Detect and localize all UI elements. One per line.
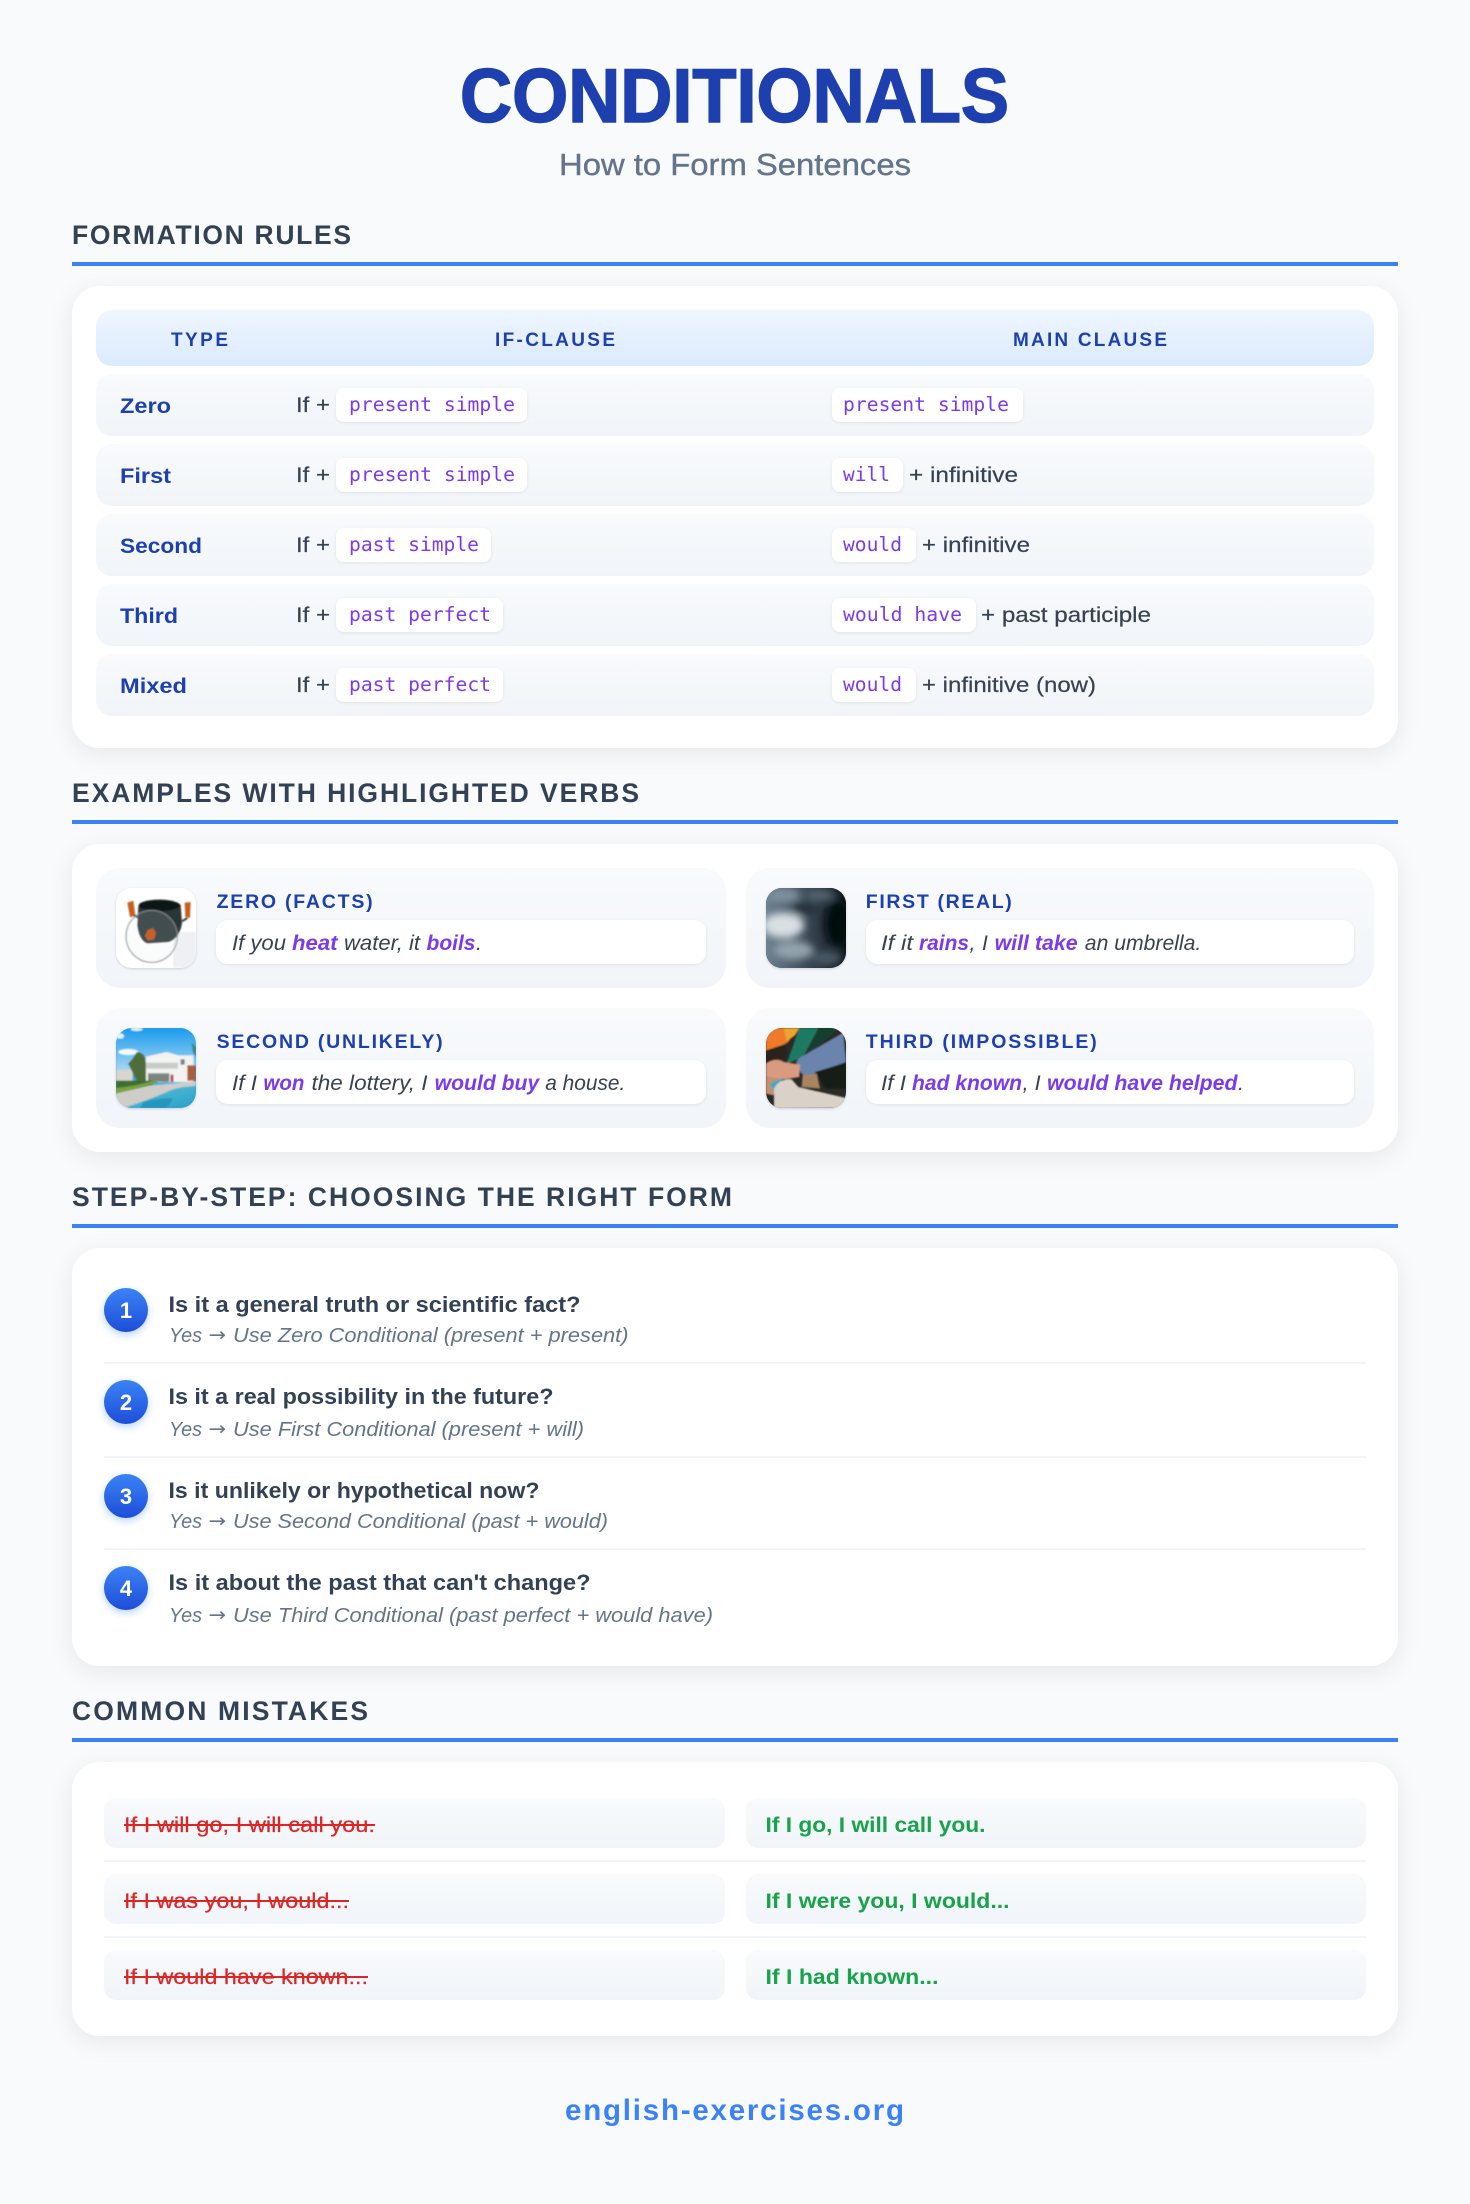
sentence: .	[476, 932, 482, 955]
row: mixed: + infinitive (now)	[922, 674, 1096, 697]
row: zero: present simple	[349, 393, 515, 416]
subtitle: How to Form Sentences	[559, 147, 911, 182]
row: mixed: would	[843, 673, 902, 696]
sentence: boils	[426, 932, 476, 955]
row: first: will	[843, 463, 890, 486]
sentence: If I	[881, 1072, 906, 1095]
mistake 2 correct	[746, 1874, 1366, 1924]
step 4: Yes	[169, 1605, 202, 1627]
sentence: water, it	[344, 932, 421, 955]
row: mixed: Mixed	[120, 675, 187, 698]
example: second	[96, 1026, 726, 1128]
panel: common mistakes	[72, 1762, 1398, 2036]
sentence: If I	[232, 1072, 257, 1095]
mistake 2 wrong: If I was you, I would...	[124, 1890, 349, 1913]
icon: stacked hands	[766, 1028, 846, 1109]
sentence: ,	[970, 932, 975, 955]
sentence: If it	[881, 932, 914, 955]
row: first: + infinitive	[909, 464, 1018, 487]
row: mixed	[96, 654, 1374, 716]
sentence: will take	[995, 932, 1078, 955]
sentence: , I	[1023, 1072, 1041, 1095]
step 2: →	[208, 1418, 226, 1440]
step 4: Is it about the past that can't change?	[168, 1570, 590, 1595]
heading: examples: EXAMPLES WITH HIGHLIGHTED VERBS	[72, 778, 639, 808]
step 3: 3	[120, 1484, 132, 1509]
row: first: First	[120, 465, 171, 488]
icon: storm clouds	[763, 888, 852, 968]
row: mixed: If +	[296, 674, 330, 697]
label: SECOND (UNLIKELY)	[217, 1031, 443, 1053]
mistake 1 correct: If I go, I will call you.	[766, 1814, 986, 1837]
step 3: Yes	[169, 1511, 202, 1533]
sentence: a house.	[545, 1072, 625, 1095]
label: ZERO (FACTS)	[217, 891, 373, 913]
step 2	[104, 1380, 584, 1441]
step 4	[104, 1566, 713, 1627]
mistake 1 wrong: If I will go, I will call you.	[124, 1814, 375, 1837]
row: third: + past participle	[981, 604, 1151, 627]
step 1	[104, 1288, 628, 1347]
sentence: I	[982, 932, 988, 955]
mistake 1 correct	[746, 1798, 1366, 1848]
table header	[96, 310, 1374, 366]
row: second: Second	[120, 535, 202, 558]
sentence: won	[263, 1072, 304, 1095]
row: third: Third	[120, 605, 178, 628]
step 3: Is it unlikely or hypothetical now?	[168, 1478, 540, 1503]
row: mixed: past perfect	[349, 673, 491, 696]
step 2: 2	[120, 1390, 132, 1415]
step 4: →	[208, 1604, 226, 1626]
row: third: past perfect	[349, 603, 491, 626]
step 1: →	[208, 1324, 226, 1346]
sentence: had known	[912, 1072, 1022, 1095]
sentence: rains	[919, 932, 969, 955]
panel: steps	[72, 1248, 1398, 1666]
row: third: If +	[296, 604, 330, 627]
heading: examples	[72, 778, 1398, 824]
mistake 2 wrong	[104, 1874, 725, 1924]
step 2: Is it a real possibility in the future?	[168, 1384, 554, 1409]
mistake 3 wrong	[104, 1950, 725, 2000]
step 4: 4	[120, 1576, 133, 1601]
icon: pot with lid	[116, 888, 196, 968]
step 2: Yes	[169, 1419, 202, 1441]
example: first	[746, 886, 1374, 988]
table header: MAIN CLAUSE	[1013, 330, 1167, 351]
mistake 1 wrong	[104, 1798, 725, 1848]
example: third	[746, 1026, 1374, 1128]
mistake 3 wrong: If I would have known...	[124, 1966, 368, 1989]
heading: common mistakes: COMMON MISTAKES	[72, 1696, 368, 1726]
row: third	[96, 584, 1374, 646]
sentence: would buy	[435, 1072, 541, 1095]
heading: step by step: STEP-BY-STEP: CHOOSING THE RIGHT FORM	[72, 1182, 732, 1212]
sentence	[216, 920, 706, 964]
row: first	[96, 444, 1374, 506]
sentence: would have helped	[1047, 1072, 1239, 1095]
step 3: Use Second Conditional (past + would)	[233, 1511, 608, 1533]
sentence: If you	[232, 932, 286, 955]
table header: IF-CLAUSE	[495, 330, 615, 351]
sentence	[866, 920, 1354, 964]
row: second	[96, 514, 1374, 576]
step 3: →	[208, 1510, 226, 1532]
heading: formation rules: FORMATION RULES	[72, 220, 351, 250]
row: second: + infinitive	[922, 534, 1030, 557]
step 1: Is it a general truth or scientific fact?	[168, 1292, 580, 1317]
title: CONDITIONALS	[460, 54, 1009, 139]
panel: examples	[71, 883, 1399, 1159]
step 1: Use Zero Conditional (present + present)	[233, 1325, 628, 1347]
row: second: past simple	[349, 533, 479, 556]
heading: step by step	[72, 1182, 1398, 1228]
label: THIRD (IMPOSSIBLE)	[866, 1031, 1097, 1053]
mistake 3 correct: If I had known...	[766, 1966, 938, 1989]
heading: formation rules	[72, 220, 1398, 266]
step 4: Use Third Conditional (past perfect + would have)	[233, 1605, 713, 1627]
row: zero	[96, 374, 1374, 436]
step 1: 1	[120, 1298, 132, 1323]
panel: formation rules table	[72, 286, 1398, 748]
sentence	[216, 1060, 706, 1104]
mistake 2 correct: If I were you, I would...	[766, 1890, 1010, 1913]
sentence	[866, 1060, 1354, 1104]
row: zero: If +	[296, 394, 330, 417]
label: FIRST (REAL)	[866, 891, 1012, 913]
table header: TYPE	[171, 330, 228, 351]
step 2: Use First Conditional (present + will)	[233, 1419, 584, 1441]
sentence: heat	[292, 932, 339, 955]
row: first: If +	[296, 464, 330, 487]
row: zero: present simple	[843, 393, 1009, 416]
row: third: would have	[843, 603, 962, 626]
footer: english-exercises.org	[565, 2094, 904, 2127]
example: zero	[96, 886, 726, 988]
mistake 3 correct	[746, 1950, 1366, 2000]
heading: common mistakes	[72, 1696, 1398, 1742]
step 1: Yes	[169, 1325, 202, 1347]
row: first: present simple	[349, 463, 515, 486]
icon: house with pool	[116, 1028, 196, 1108]
sentence: the lottery, I	[312, 1072, 428, 1095]
row: second: would	[843, 533, 902, 556]
sentence: .	[1238, 1072, 1244, 1095]
row: zero: Zero	[120, 395, 171, 418]
sentence: an umbrella.	[1085, 932, 1201, 955]
row: second: If +	[296, 534, 330, 557]
step 3	[104, 1474, 608, 1533]
